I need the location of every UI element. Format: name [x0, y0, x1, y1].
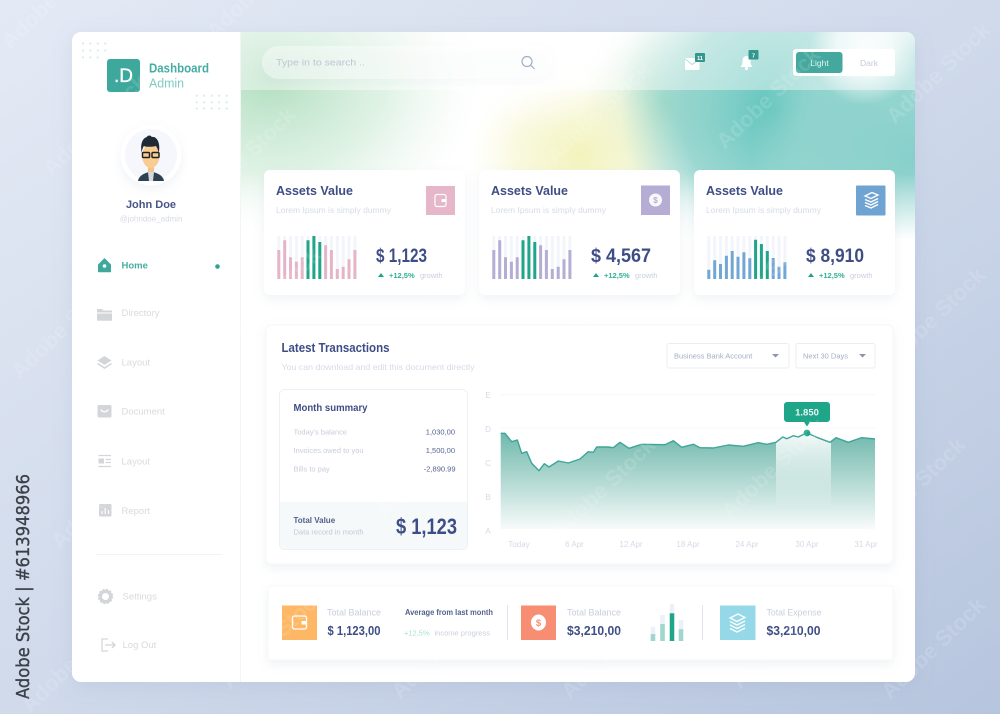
- watermark: Adobe Stock: [186, 102, 301, 214]
- total value: $ 1,123: [396, 514, 457, 539]
- icon: coin: [641, 186, 670, 215]
- x axis labels: 24 Apr: [735, 540, 759, 549]
- watermark: Adobe Stock: [211, 242, 326, 354]
- nav: Settings: Settings: [122, 592, 157, 602]
- watermark: Adobe Stock: [381, 237, 496, 349]
- x axis labels: 31 Apr: [854, 540, 878, 549]
- theme toggle: Light: [810, 58, 829, 68]
- growth indicator: growth: [635, 271, 658, 280]
- growth indicator: +12,5%: [819, 271, 845, 280]
- panel: latest transactions: [266, 325, 893, 564]
- total value: [294, 514, 457, 539]
- x axis labels: 12 Apr: [619, 540, 643, 549]
- watermark: Adobe Stock: [556, 592, 671, 704]
- watermark: Adobe Stock: [541, 57, 656, 169]
- panel: balance summary: [268, 586, 893, 660]
- growth indicator: +12,5%: [604, 271, 630, 280]
- panel: balance summary: Total Balance: [327, 608, 381, 618]
- average from last month: Average from last month: [405, 607, 493, 617]
- month summary panel: [280, 390, 468, 550]
- panel: balance summary: $3,210,00: [567, 624, 621, 638]
- nav: Layout 2: [98, 456, 150, 468]
- card 2: Assets Value: [491, 183, 568, 198]
- panel: balance summary: Total Expense: [766, 608, 822, 618]
- icon: coral coin: $: [536, 618, 542, 629]
- panel: balance summary: $3,210,00: [766, 624, 821, 638]
- icon: magnifier: [522, 56, 534, 69]
- icon: coin: $: [653, 196, 658, 205]
- heading: Latest Transactions: [282, 341, 390, 355]
- nav: Log Out: Log Out: [122, 640, 157, 651]
- row: invoices: Invoices owed to you: [294, 446, 364, 455]
- tooltip: 1.850: [795, 408, 819, 418]
- y axis labels: [485, 391, 491, 536]
- y axis labels: A: [485, 527, 491, 536]
- growth indicator: growth: [420, 271, 443, 280]
- x axis labels: 6 Apr: [565, 540, 584, 549]
- bar chart: [494, 236, 570, 279]
- decorative dots right: [197, 96, 229, 108]
- watermark: Adobe Stock: [716, 412, 831, 524]
- logo: [107, 59, 140, 92]
- brand name: Dashboard: [149, 62, 209, 76]
- dropdown: period: Next 30 Days: [803, 352, 848, 360]
- growth indicator: +12,5%: [389, 271, 415, 280]
- card 1: $ 1,123: [376, 246, 427, 267]
- highlight band: [776, 434, 831, 497]
- icon: coral coin: [521, 606, 556, 640]
- average from last month: +12,5%: [404, 628, 430, 638]
- watermark: Adobe Stock: [176, 442, 291, 554]
- watermark: Adobe Stock: [38, 69, 153, 181]
- stock id side text: Adobe Stock | #613948966: [13, 474, 34, 699]
- nav: Home: [98, 258, 220, 272]
- watermark: Adobe Stock: [706, 222, 821, 334]
- card 3: Assets Value: [706, 183, 783, 198]
- row: bills: Bills to pay: [294, 464, 330, 474]
- row: today's balance: Today's balance: [294, 428, 347, 436]
- brand name: Admin: [149, 76, 184, 90]
- card 1: Assets Value: [276, 183, 353, 198]
- header gradient: [241, 32, 915, 234]
- search bar: [262, 46, 552, 79]
- nav: Layout: [97, 356, 150, 369]
- x axis labels: 30 Apr: [795, 540, 819, 549]
- card 2: $ 4,567: [591, 246, 651, 267]
- watermark: Adobe Stock: [726, 582, 841, 694]
- row: today's balance: [294, 428, 455, 436]
- watermark: Adobe Stock: [546, 432, 661, 544]
- nav: Layout: Layout: [122, 358, 150, 368]
- user name: John Doe: [126, 199, 176, 211]
- area chart: [485, 391, 878, 549]
- icon: mail with badge: [685, 53, 705, 70]
- growth indicator: [808, 271, 873, 280]
- watermark: Adobe Stock: [6, 272, 121, 384]
- card 3: Lorem Ipsum is simply dummy: [706, 205, 822, 215]
- watermark: Adobe Stock: [856, 432, 971, 544]
- growth indicator: growth: [850, 271, 873, 280]
- icon: orange wallet: [282, 606, 317, 640]
- watermark: Adobe Stock: [46, 442, 161, 554]
- card 1: [264, 170, 465, 295]
- dropdown: period: [796, 344, 875, 368]
- icon: wallet: [426, 186, 455, 215]
- brand name: [149, 62, 209, 90]
- theme toggle: Dark: [860, 58, 879, 68]
- nav: Home: Home: [122, 260, 148, 272]
- nav: Document: [98, 405, 165, 418]
- nav: Directory: [97, 308, 160, 321]
- watermark: Adobe Stock: [876, 262, 991, 374]
- row: invoices: [294, 446, 455, 455]
- total value: Data record in month: [294, 528, 364, 536]
- x axis labels: [508, 540, 878, 549]
- tooltip: [784, 402, 830, 436]
- watermark: Adobe Stock: [876, 592, 991, 704]
- card 2: [479, 170, 680, 295]
- average from last month: [404, 607, 493, 638]
- x axis labels: Today: [508, 540, 530, 549]
- nav: Report: [99, 504, 150, 517]
- logo: .D: [114, 66, 133, 87]
- row: bills: [294, 464, 456, 474]
- watermark: Adobe Stock: [541, 252, 656, 364]
- sidebar: [83, 32, 241, 682]
- search bar: Type in to search ..: [276, 58, 365, 68]
- nav: Report: Report: [122, 506, 150, 517]
- bar chart: [279, 236, 355, 279]
- nav: Directory: Directory: [122, 308, 160, 319]
- watermark: Adobe Stock: [881, 17, 996, 129]
- theme toggle: [793, 49, 895, 76]
- y axis labels: E: [485, 391, 491, 400]
- nav: Log Out: [102, 639, 157, 651]
- decorative dots left: [83, 44, 107, 58]
- watermark: Adobe Stock: [711, 42, 826, 154]
- row: invoices: 1,500,00: [426, 446, 455, 455]
- total value: Total Value: [294, 516, 336, 525]
- growth indicator: [378, 271, 443, 280]
- row: today's balance: 1,030,00: [426, 428, 455, 436]
- nav: Layout 2: Layout: [122, 456, 150, 468]
- avatar: [120, 124, 182, 186]
- icon: mail with badge: 11: [697, 56, 703, 62]
- average from last month: income progress: [434, 628, 490, 638]
- mini bar chart: [653, 604, 681, 641]
- watermark: Adobe Stock: [386, 592, 501, 704]
- growth indicator: [593, 271, 658, 280]
- y axis labels: B: [485, 493, 491, 502]
- y axis labels: D: [485, 425, 491, 434]
- top bar veil: [241, 32, 915, 90]
- panel: balance summary: $ 1,123,00: [328, 624, 381, 638]
- chart line: [501, 433, 875, 471]
- bar chart: [709, 236, 785, 279]
- card 2: Lorem Ipsum is simply dummy: [491, 205, 607, 215]
- icon: bell with badge: [740, 50, 758, 70]
- row: bills: -2,890.99: [424, 464, 456, 474]
- y axis labels: C: [485, 459, 491, 468]
- user handle: @johndoe_admin: [120, 214, 182, 224]
- nav: Settings: [98, 590, 157, 604]
- icon: bell with badge: 7: [752, 54, 755, 60]
- subheading: You can download and edit this document directly: [282, 362, 475, 372]
- icon: blue cash stack: [720, 606, 756, 640]
- x axis labels: 18 Apr: [676, 540, 700, 549]
- watermark: Adobe Stock: [216, 582, 331, 694]
- nav: Document: Document: [122, 406, 165, 418]
- watermark: Adobe Stock: [369, 82, 484, 194]
- card 3: $ 8,910: [806, 246, 864, 267]
- icon: cash stack: [856, 186, 886, 216]
- card 1: Lorem Ipsum is simply dummy: [276, 205, 392, 215]
- dropdown: account: Business Bank Account: [674, 352, 753, 360]
- dropdown: account: [667, 344, 789, 368]
- panel: balance summary: Total Balance: [567, 608, 621, 618]
- month summary panel: Month summary: [294, 403, 368, 414]
- watermark: Adobe Stock: [371, 412, 486, 524]
- card 3: [694, 170, 895, 295]
